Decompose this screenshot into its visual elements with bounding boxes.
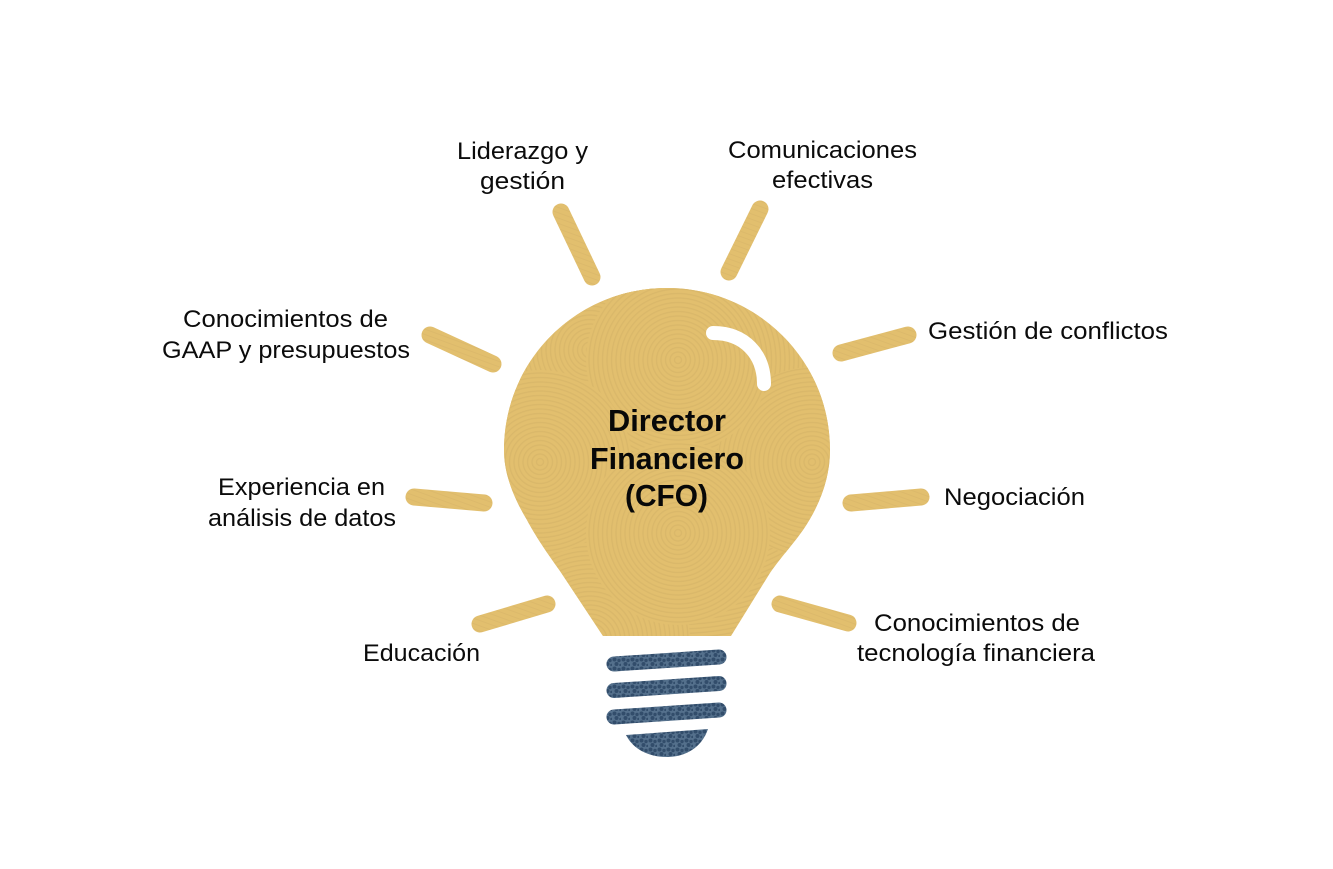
label: experiencia: análisis de datos — [208, 505, 396, 532]
label: educacion: Educación — [363, 640, 480, 667]
label: comunicaciones: efectivas — [772, 167, 873, 194]
label: tecnologia — [857, 610, 1096, 667]
center title — [590, 403, 744, 513]
label: negociacion: Negociación — [944, 484, 1085, 511]
center title: Financiero — [590, 441, 744, 476]
ray: liderazgo — [561, 212, 592, 277]
bulb glass with swirl texture — [504, 288, 830, 636]
ray: comunicaciones — [729, 209, 760, 272]
label: comunicaciones — [728, 137, 917, 194]
label: comunicaciones: Comunicaciones — [728, 137, 917, 164]
ray: educacion — [480, 604, 547, 624]
label: liderazgo — [457, 138, 588, 195]
label: experiencia: Experiencia en — [218, 474, 385, 501]
bulb base — [614, 657, 719, 757]
label: tecnologia: Conocimientos de — [874, 610, 1080, 637]
ray: experiencia — [414, 497, 484, 503]
bulb highlight — [713, 333, 764, 384]
label: experiencia — [208, 474, 396, 532]
base cap — [626, 729, 708, 757]
center title: (CFO) — [625, 478, 708, 513]
base ridge 3 — [614, 710, 719, 717]
label: gestion de conflictos: Gestión de conflictos — [928, 318, 1168, 345]
label: GAAP: GAAP y presupuestos — [162, 337, 410, 364]
base ridge 2 — [614, 684, 719, 690]
light bulb — [504, 288, 830, 757]
label: GAAP — [162, 306, 410, 364]
ray: negociacion — [851, 497, 921, 503]
label: tecnologia: tecnología financiera — [857, 640, 1096, 667]
center title: Director — [608, 403, 726, 438]
base ridge 1 — [614, 657, 719, 664]
ray: conflictos — [841, 335, 908, 353]
ray: tecnologia — [780, 604, 848, 623]
label: liderazgo: Liderazgo y — [457, 138, 588, 165]
label: GAAP: Conocimientos de — [183, 306, 388, 333]
ray: GAAP — [430, 335, 493, 364]
label: liderazgo: gestión — [480, 168, 565, 195]
